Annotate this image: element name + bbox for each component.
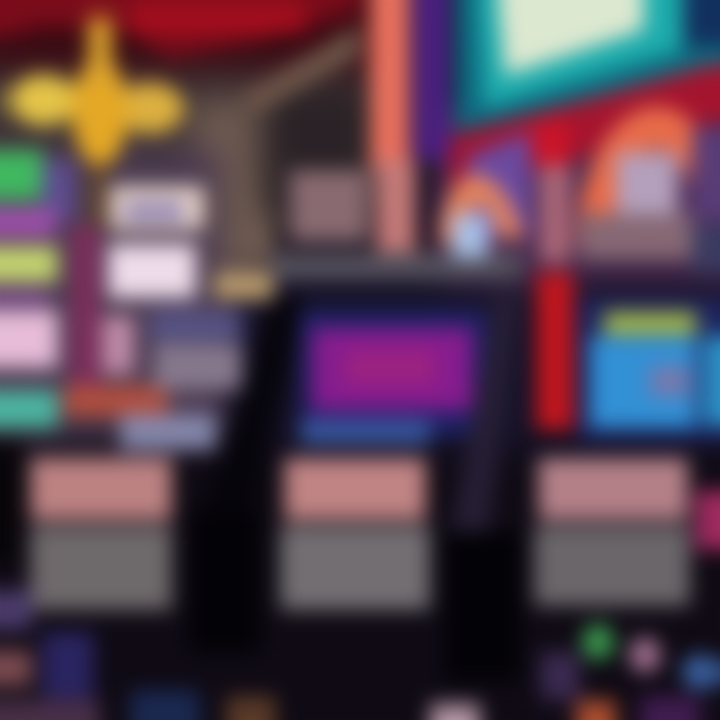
panel: dark floor with coloured lights (0, 590, 718, 720)
panel: pink and purple columns (272, 0, 522, 280)
panel: centre machine button deck (280, 458, 430, 610)
panel: left machine light strips (0, 150, 168, 428)
panel: central purple machine screen (300, 310, 486, 444)
icon: gold chandelier (10, 18, 184, 230)
panel: right machine button deck (534, 458, 720, 606)
panel: red light strip (536, 272, 574, 430)
panel: left machine button deck (30, 458, 172, 610)
panel: centre-left machine top (108, 186, 274, 450)
panel: top-right screen (456, 0, 720, 130)
ceiling: red bands (0, 0, 360, 115)
panel: right blue machine screen (578, 300, 720, 440)
panel: red band and arches (438, 62, 720, 273)
panel: dark machine frames (0, 288, 522, 680)
